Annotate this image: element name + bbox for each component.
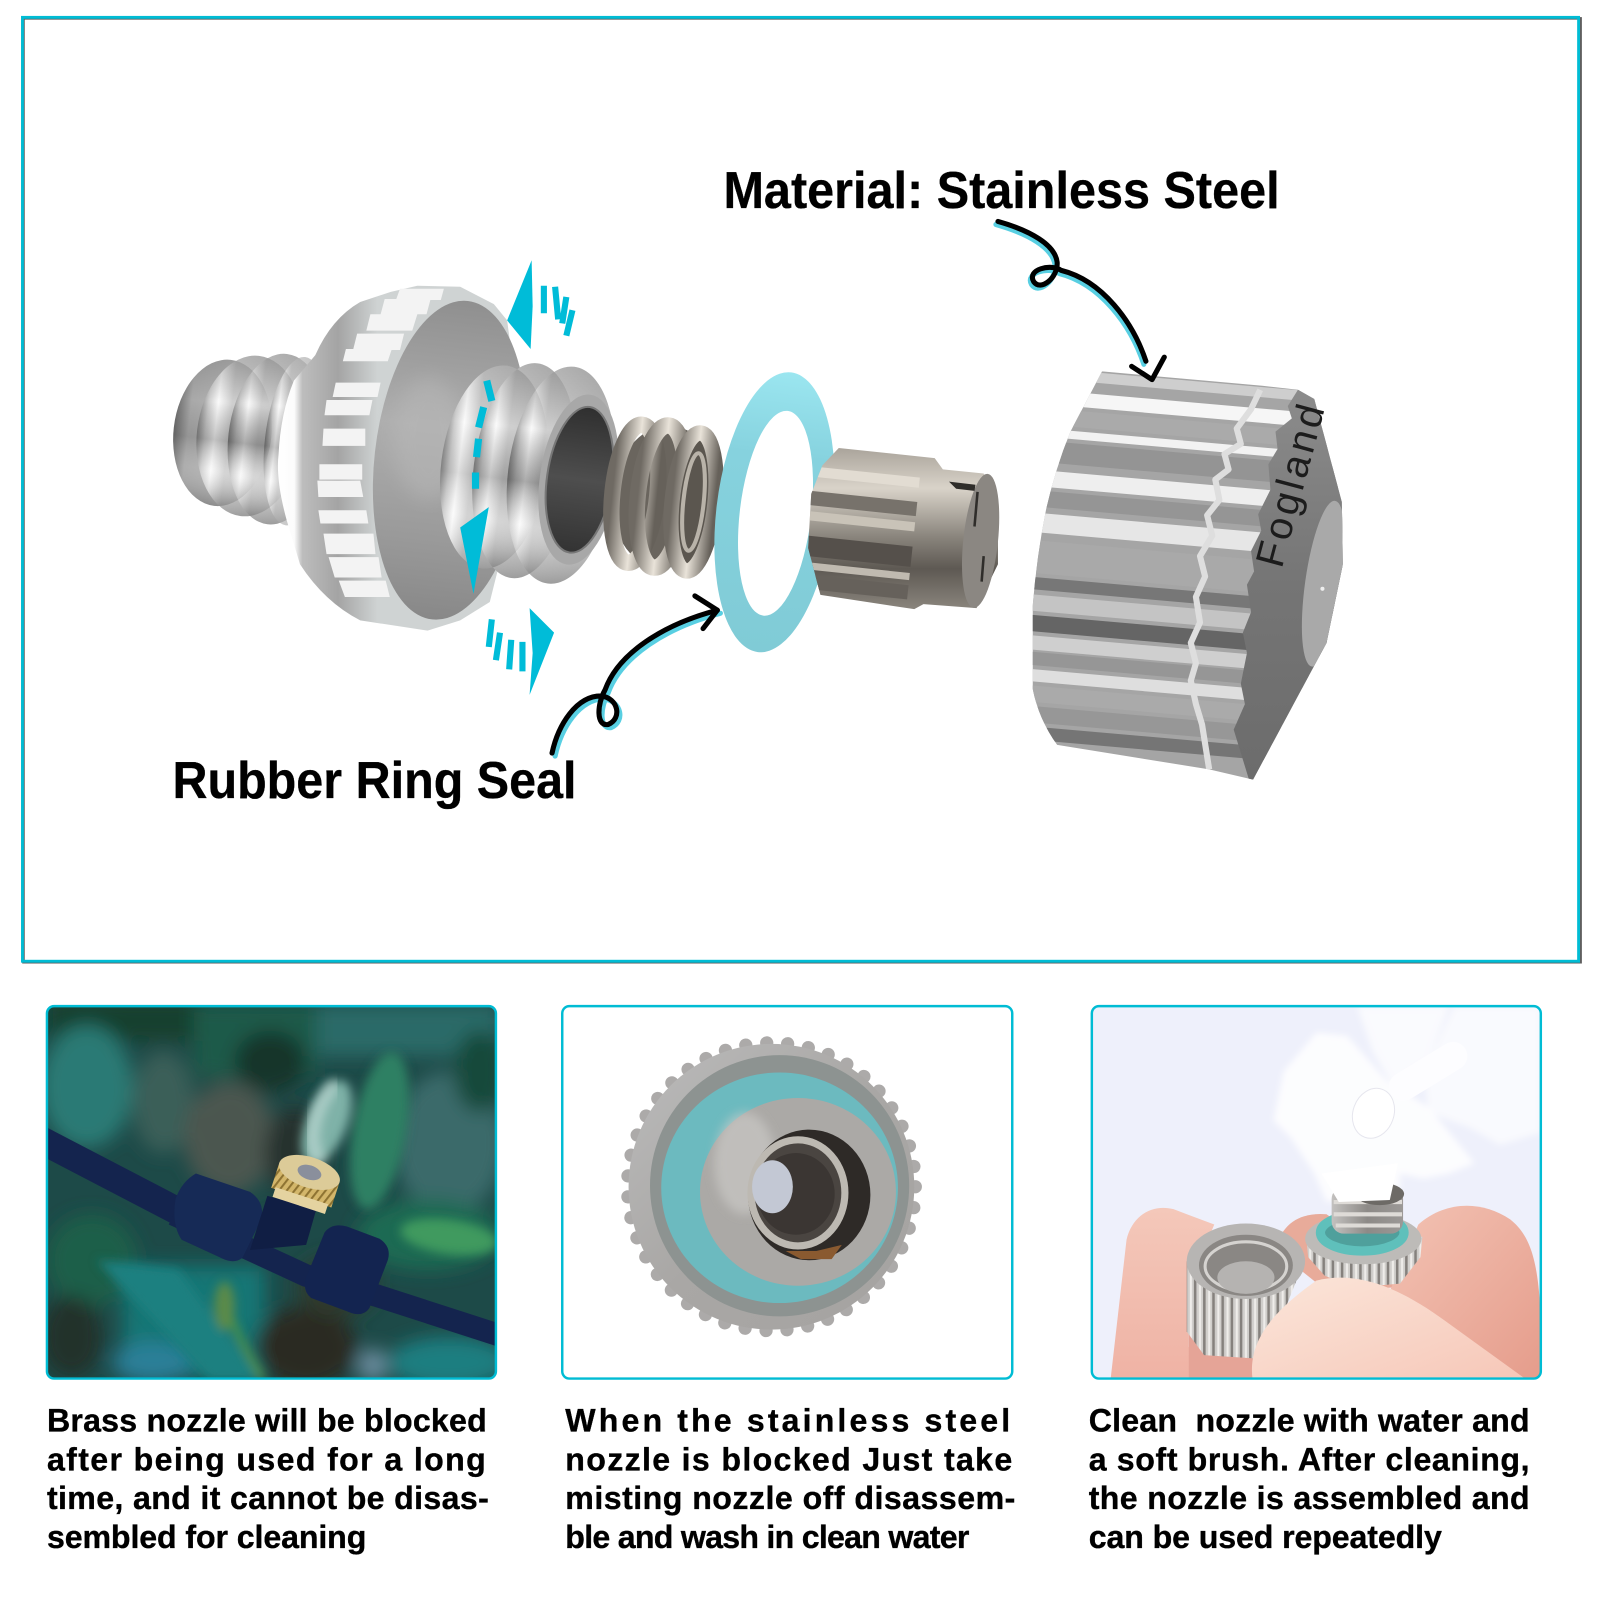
text block: stainless nozzle: misting nozzle off disassem- xyxy=(565,1480,1015,1516)
mist xyxy=(313,1087,332,1158)
text block: brass nozzle: time, and it cannot be disas- xyxy=(47,1480,489,1516)
panel: brass nozzle photo xyxy=(37,1000,510,1388)
text block: brass nozzle xyxy=(47,1403,489,1555)
thumb xyxy=(1252,1278,1531,1383)
panel: stainless steel nozzle photo xyxy=(562,1006,1012,1379)
nozzle cap xyxy=(1032,372,1343,780)
logo text on cap: Fogland xyxy=(1248,400,1333,572)
arrow: ring seal xyxy=(552,596,720,756)
heading: material: Material: Stainless Steel xyxy=(723,162,1280,220)
icons: cyan rotation arrows xyxy=(460,260,572,695)
bore xyxy=(528,389,629,570)
text block: cleaning: can be used repeatedly xyxy=(1089,1519,1442,1555)
spring xyxy=(605,420,726,574)
nozzle body exploded xyxy=(164,286,629,631)
panel: cleaning photo xyxy=(1092,1006,1541,1383)
rubber ring xyxy=(700,366,849,659)
photo background foliage xyxy=(41,1000,510,1388)
hose xyxy=(37,1138,510,1339)
seal ring xyxy=(650,1055,909,1316)
text block: brass nozzle: sembled for cleaning xyxy=(47,1519,366,1555)
brush tip over stud xyxy=(1333,1182,1394,1202)
main frame xyxy=(22,17,1581,962)
text block: cleaning: the nozzle is assembled and xyxy=(1089,1480,1530,1516)
text block: cleaning: a soft brush. After cleaning, xyxy=(1089,1441,1530,1477)
text block: stainless nozzle xyxy=(565,1403,1015,1555)
inner metal xyxy=(700,1098,896,1286)
right stud with ring xyxy=(1305,1183,1422,1288)
brass nozzle xyxy=(271,1154,340,1214)
left thread xyxy=(164,342,336,530)
inner core xyxy=(808,448,1000,610)
text block: brass nozzle: after being used for a long xyxy=(47,1441,486,1477)
knurled edge xyxy=(628,1043,915,1331)
text block: brass nozzle: Brass nozzle will be blocked xyxy=(47,1403,487,1439)
heading: rubber ring seal: Rubber Ring Seal xyxy=(172,752,577,810)
text block: stainless nozzle: nozzle is blocked Just take xyxy=(565,1441,1012,1477)
arrow: material to cap xyxy=(996,221,1164,380)
right thread xyxy=(428,352,627,590)
leaves xyxy=(97,1048,500,1380)
left cap xyxy=(1187,1223,1305,1359)
brush xyxy=(1273,1006,1541,1202)
text block: cleaning xyxy=(1089,1403,1530,1555)
text block: stainless nozzle: When the stainless steel xyxy=(565,1403,1010,1439)
text block: cleaning: Clean nozzle with water and xyxy=(1089,1403,1530,1439)
text block: stainless nozzle: ble and wash in clean water xyxy=(565,1519,970,1555)
fingers xyxy=(1110,1208,1214,1378)
flange xyxy=(278,286,543,631)
